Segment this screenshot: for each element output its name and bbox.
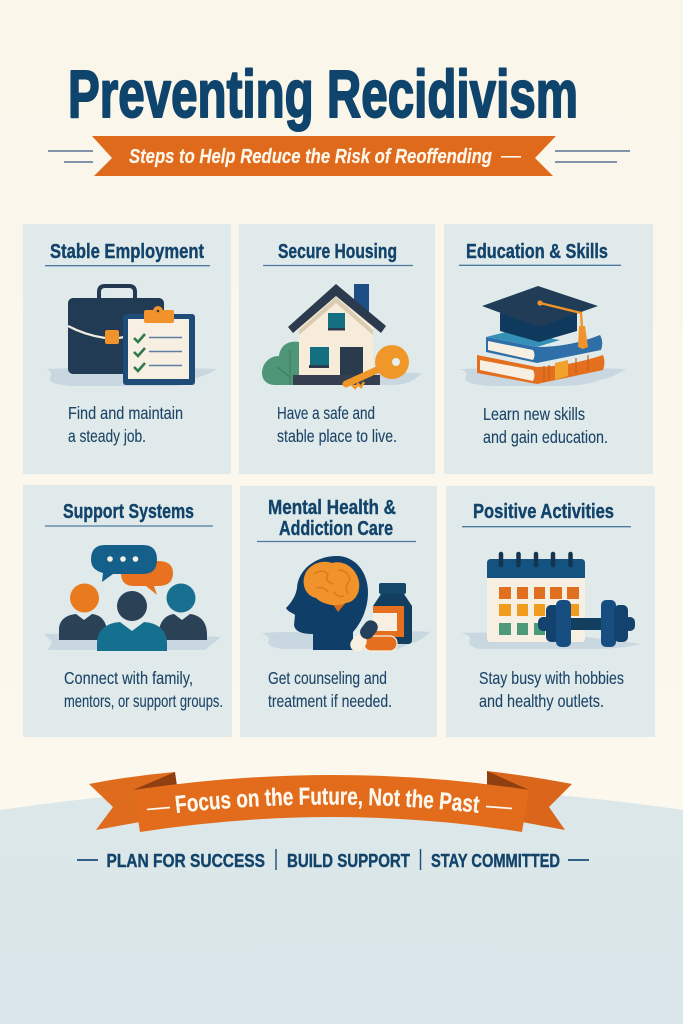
footer banner: [89, 771, 572, 832]
description: stable employment: Find and maintain: [68, 403, 183, 423]
heading: stable employment: Stable Employment: [50, 240, 204, 263]
description: mental health and addiction care: [268, 668, 392, 711]
description: support systems: mentors, or support groups.: [64, 691, 223, 711]
subtitle ribbon: Steps to Help Reduce the Risk of Reoffending: [129, 145, 492, 168]
tagline: [77, 849, 589, 871]
heading: education and skills: Education & Skills: [466, 240, 608, 263]
panel: positive activities: [446, 486, 655, 737]
panel: mental health and addiction care: [240, 486, 437, 737]
icon: house and key: [262, 284, 422, 388]
icon: group with speech bubbles: [44, 545, 221, 651]
heading: positive activities: Positive Activities: [473, 500, 614, 523]
subtitle ribbon: [92, 136, 556, 176]
icon: head with brain, bottle and pills: [262, 556, 430, 654]
description: education and skills: [483, 404, 608, 447]
icon: graduation cap and books: [459, 286, 626, 386]
description: secure housing: [277, 403, 397, 446]
icon: briefcase and clipboard: [46, 286, 217, 386]
description: positive activities: [479, 668, 624, 711]
description: secure housing: Have a safe and: [277, 403, 375, 423]
heading: mental health and addiction care: Addiction Care: [279, 517, 393, 540]
description: mental health and addiction care: Get counseling and: [268, 668, 387, 688]
footer hill: [0, 785, 683, 1024]
tagline: STAY COMMITTED: [431, 850, 560, 871]
panel: education and skills: [444, 224, 653, 474]
heading: support systems: Support Systems: [63, 500, 194, 523]
description: support systems: [64, 668, 223, 711]
footer banner: Focus on the Future, Not the Past: [175, 788, 480, 813]
description: stable employment: a steady job.: [68, 426, 146, 446]
heading: secure housing: Secure Housing: [278, 240, 397, 263]
description: positive activities: Stay busy with hobbies: [479, 668, 624, 688]
description: mental health and addiction care: treatment if needed.: [268, 691, 392, 711]
description: positive activities: and healthy outlets.: [479, 691, 604, 711]
heading: mental health and addiction care: [268, 496, 396, 540]
panel: secure housing: [239, 224, 435, 474]
panel: support systems: [23, 485, 232, 737]
tagline: BUILD SUPPORT: [287, 850, 411, 871]
icon: calendar and dumbbell: [461, 554, 641, 649]
description: stable employment: [68, 403, 183, 446]
description: education and skills: Learn new skills: [483, 404, 585, 424]
heading: mental health and addiction care: Mental Health &: [268, 496, 396, 519]
description: education and skills: and gain education.: [483, 427, 608, 447]
tagline: PLAN FOR SUCCESS: [106, 850, 265, 871]
panel: stable employment: [23, 224, 231, 474]
description: secure housing: stable place to live.: [277, 426, 397, 446]
description: support systems: Connect with family,: [64, 668, 193, 688]
